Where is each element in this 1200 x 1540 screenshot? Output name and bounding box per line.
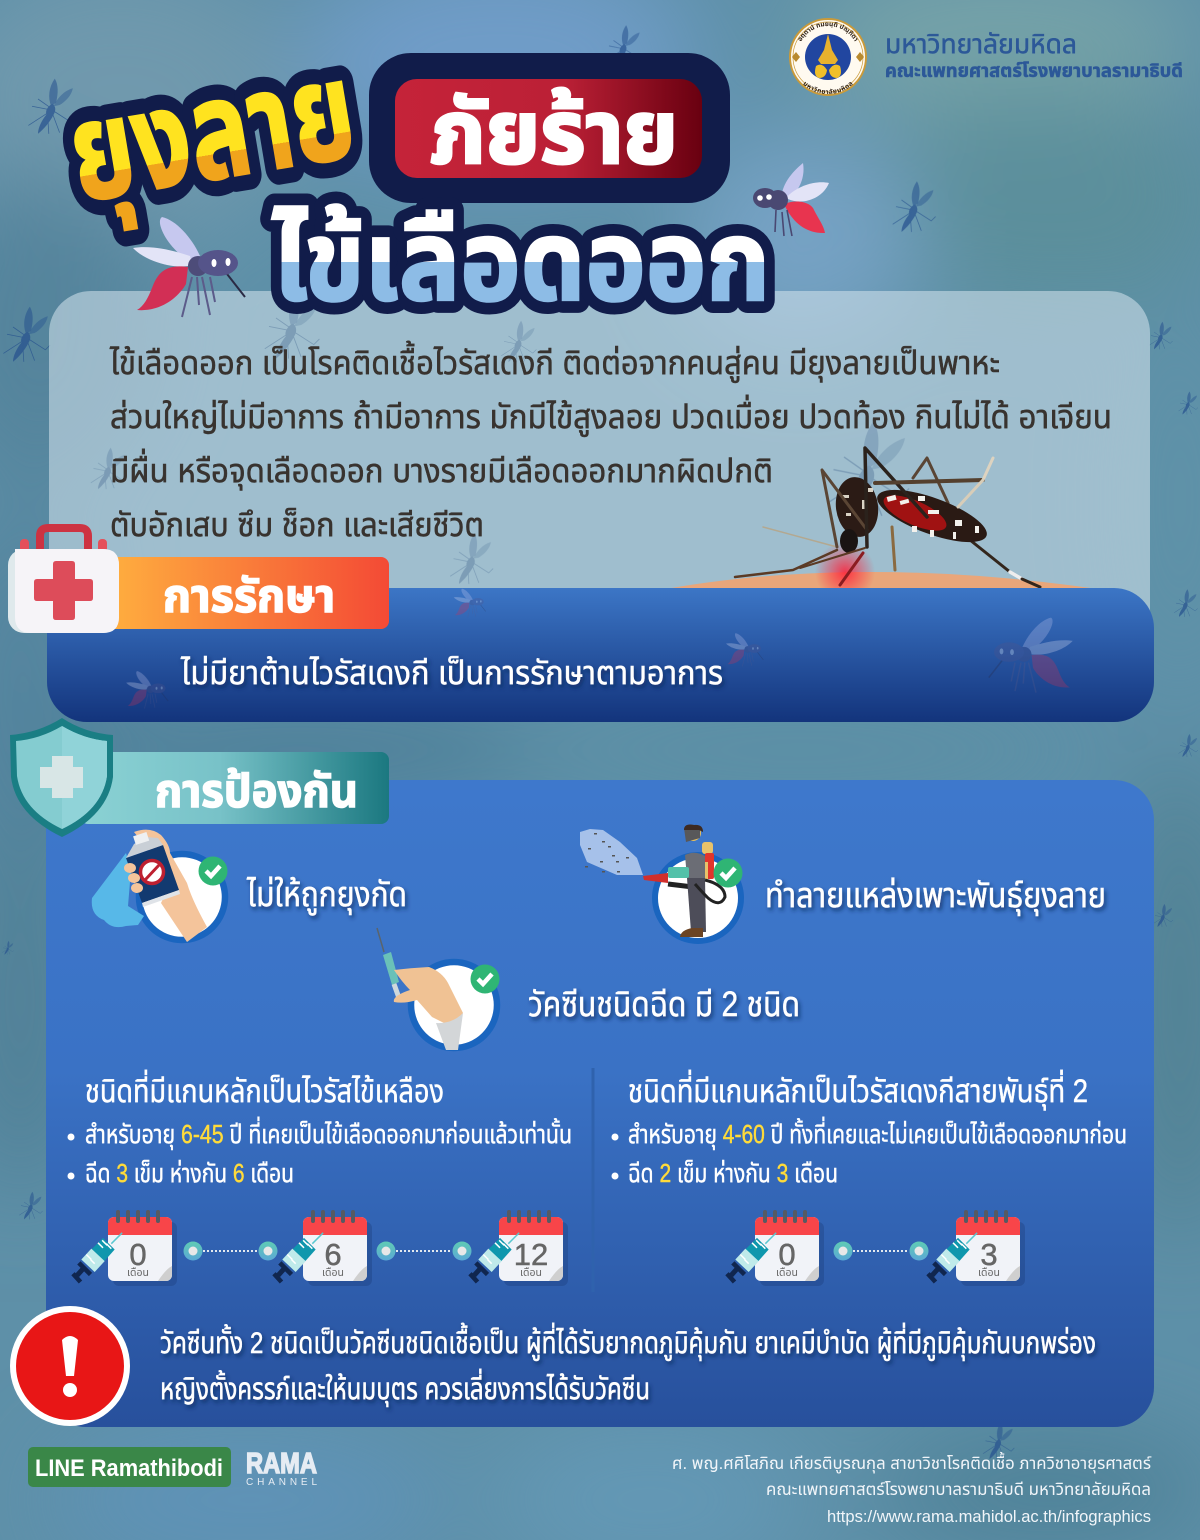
label: vaccine types: วัคซีนชนิดฉีด มี 2 ชนิด [528,985,800,1024]
title: ไข้เลือดออก: ไข้เลือดออก [272,199,770,324]
icon: shield [10,718,113,837]
footer: credits: https://www.rama.mahidol.ac.th/infographics [827,1507,1151,1526]
timeline: 3-dose schedule: เดือน [520,1267,542,1279]
footer: RAMA Channel logo: RAMA [246,1448,317,1480]
label: destroy breeding sites: ทำลายแหล่งเพาะพันธุ์ยุงลาย [765,876,1106,916]
warning text: หญิงตั้งครรภ์และให้นมบุตร ควรเลี่ยงการได้รับวัคซีน [160,1368,650,1407]
timeline: 3-dose schedule: 0 [129,1237,147,1272]
column: dengue serotype 2 backbone vaccine: ฉีด 2 เข็ม ห่างกัน 3 เดือน [628,1158,838,1188]
title badge: ภัยร้าย [369,53,730,203]
description text: ตับอักเสบ ซึม ช็อก และเสียชีวิต [110,506,484,543]
timeline: 2-dose schedule: 0 [778,1237,796,1272]
icon: repellent spray [92,830,228,942]
university name: คณะแพทยศาสตร์โรงพยาบาลรามาธิบดี [885,61,1183,82]
title: ไข้เลือดออก: ไข้เลือดออก [272,199,770,324]
icon: cartoon mosquito right [753,163,829,236]
column: yellow fever backbone vaccine: ฉีด 3 เข็ม ห่างกัน 6 เดือน [85,1158,294,1188]
timeline: 3-dose schedule: เดือน [322,1267,344,1279]
column: dengue serotype 2 backbone vaccine: สำหรับอายุ 4-60 ปี ทั้งที่เคยและไม่เคยเป็นไข้เลือดออกมาก่อน [628,1116,1127,1150]
heading: treatment: การรักษา [163,570,335,622]
logo: Mahidol University seal: มหาวิทยาลัยมหิดล [803,82,853,94]
photo: mosquito biting skin [660,448,1105,602]
description text: ไข้เลือดออก เป็นโรคติดเชื้อไวรัสเดงกี ติดต่อจากคนสู่คน มียุงลายเป็นพาหะ [109,340,1000,383]
timeline: 3-dose schedule: 6 [324,1237,342,1272]
footer: credits: ศ. พญ.ศศิโสภิณ เกียรติบูรณกุล สาขาวิชาโรคติดเชื้อ ภาควิชาอายุรศาสตร์ [672,1451,1152,1475]
panel: treatment: ไม่มียาต้านไวรัสเดงกี เป็นการรักษาตามอาการ [180,654,723,691]
title: ยุงลาย: ยุงลาย [59,34,367,237]
footer: RAMA Channel logo: CHANNEL [246,1477,317,1488]
timeline: 3-dose schedule [73,1212,568,1286]
column: dengue serotype 2 backbone vaccine [612,1069,1127,1188]
panel: treatment [47,588,1154,722]
footer: LINE badge [28,1447,231,1487]
label: no mosquito bites: ไม่ให้ถูกยุงกัด [246,875,407,915]
column: yellow fever backbone vaccine: ชนิดที่มีแกนหลักเป็นไวรัสไข้เหลือง [85,1069,444,1109]
timeline: 2-dose schedule: 3 [980,1237,998,1272]
university name [885,29,1183,82]
heading: prevention [80,752,389,824]
timeline: 2-dose schedule [727,1212,1025,1286]
heading: prevention: การป้องกัน [155,765,358,817]
column: yellow fever backbone vaccine: สำหรับอายุ 6-45 ปี ที่เคยเป็นไข้เลือดออกมาก่อนแล้วเท่านั้น [85,1116,572,1150]
heading: treatment [100,557,389,629]
panel: prevention [46,780,1154,1427]
column: yellow fever backbone vaccine [68,1069,572,1188]
timeline: 2-dose schedule: เดือน [776,1267,798,1279]
column: dengue serotype 2 backbone vaccine: ชนิดที่มีแกนหลักเป็นไวรัสเดงกีสายพันธุ์ที่ 2 [628,1069,1088,1110]
title badge: ภัยร้าย: ภัยร้าย [430,83,678,182]
icon: cartoon mosquito left [133,217,245,317]
icon: fogging worker [580,825,742,941]
panel: description [49,291,1150,651]
timeline: 3-dose schedule: เดือน [127,1267,149,1279]
faint mosquitoes on description panel [91,294,909,584]
icon: first aid kit [8,528,119,633]
timeline: 3-dose schedule: 12 [514,1237,548,1272]
logo: Mahidol University seal: อตฺตานํ ทมยนฺติ ปณฺฑิตา [798,22,858,42]
footer: credits [672,1451,1152,1526]
university name: มหาวิทยาลัยมหิดล [885,29,1077,59]
description text: ส่วนใหญ่ไม่มีอาการ ถ้ามีอาการ มักมีไข้สูงลอย ปวดเมื่อย ปวดท้อง กินไม่ได้ อาเจียน [110,394,1112,437]
footer: RAMA Channel logo [246,1448,317,1488]
title: ยุงลาย: ยุงลาย [59,34,367,237]
timeline: 2-dose schedule: เดือน [978,1267,1000,1279]
description text: มีผื่น หรือจุดเลือดออก บางรายมีเลือดออกมากผิดปกติ [110,448,773,491]
footer: LINE badge: LINE Ramathibodi [35,1455,223,1482]
description text [109,340,1112,543]
logo: Mahidol University seal [789,18,867,96]
warning text [160,1322,1096,1407]
footer: credits: คณะแพทยศาสตร์โรงพยาบาลรามาธิบดี มหาวิทยาลัยมหิดล [766,1480,1151,1499]
icon: vaccine hand [377,928,500,1050]
icon: warning exclamation [10,1306,130,1426]
